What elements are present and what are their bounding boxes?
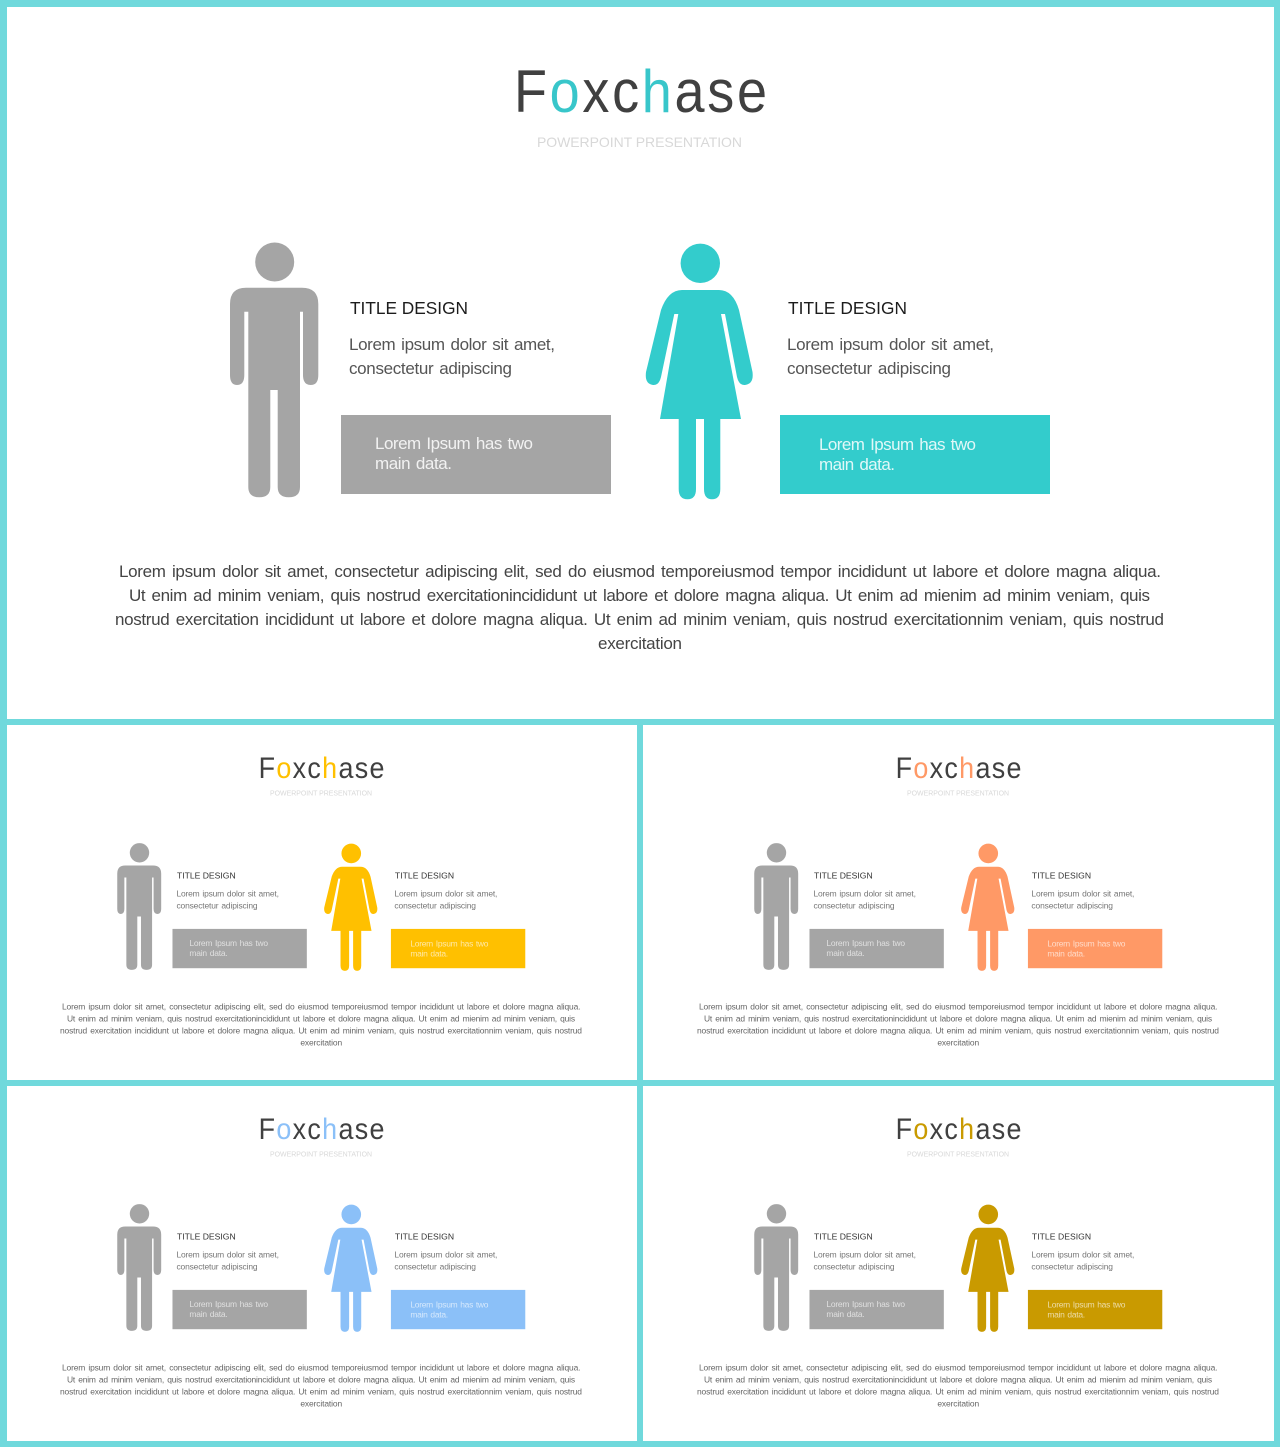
text block: left description: consectetur adipiscing: [176, 901, 258, 911]
text block: right description: [394, 1250, 497, 1272]
text block: paragraph: Lorem ipsum dolor sit amet, consectetur adipiscing elit, sed do eiusmod temporeiusmod tempor incididunt ut labore et dolore magna aliqua.: [699, 1002, 1218, 1012]
icon: man: [230, 242, 318, 497]
text block: paragraph: Ut enim ad minim veniam, quis nostrud exercitationincididunt ut labore et dolore magna aliqua. Ut enim ad mienim ad minim veniam, quis: [129, 586, 1150, 605]
text block: left description: Lorem ipsum dolor sit amet,: [813, 1250, 916, 1260]
callout: colored data box: Lorem Ipsum has two: [410, 938, 489, 948]
text block: left description: consectetur adipiscing: [813, 901, 895, 911]
callout: grey data box: main data.: [375, 454, 452, 473]
callout: grey data box: main data.: [189, 948, 228, 958]
panel: small slide gold: [643, 1086, 1274, 1441]
text block: paragraph: Ut enim ad minim veniam, quis nostrud exercitationincididunt ut labore et dolore magna aliqua. Ut enim ad mienim ad minim veniam, quis: [704, 1374, 1212, 1384]
callout: colored data box: main data.: [819, 455, 895, 474]
callout: grey data box: Lorem Ipsum has two: [826, 938, 905, 948]
text block: left description: [176, 1250, 279, 1272]
text block: left description: Lorem ipsum dolor sit amet,: [349, 335, 555, 354]
text block: paragraph: Ut enim ad minim veniam, quis nostrud exercitationincididunt ut labore et dolore magna aliqua. Ut enim ad mienim ad minim veniam, quis: [67, 1013, 575, 1023]
heading: left title design: TITLE DESIGN: [350, 298, 468, 318]
text block: paragraph: Lorem ipsum dolor sit amet, consectetur adipiscing elit, sed do eiusmod temporeiusmod tempor incididunt ut labore et dolore magna aliqua.: [62, 1002, 581, 1012]
callout: colored data box: Lorem Ipsum has two: [1047, 1299, 1126, 1309]
subtitle: POWERPOINT PRESENTATION: [907, 791, 1009, 798]
heading: right title design: TITLE DESIGN: [788, 298, 907, 318]
subtitle: POWERPOINT PRESENTATION: [270, 1152, 372, 1159]
callout: colored data box: main data.: [1047, 1309, 1085, 1319]
icon: man: [754, 843, 798, 970]
title: Foxchase logo: Foxchase: [896, 1113, 1021, 1146]
icon: woman: [961, 1205, 1014, 1332]
callout: colored data box: [391, 929, 525, 968]
callout: grey data box: [172, 929, 307, 968]
text block: paragraph: Lorem ipsum dolor sit amet, consectetur adipiscing elit, sed do eiusmod temporeiusmod tempor incididunt ut labore et dolore magna aliqua.: [62, 1363, 581, 1373]
text block: paragraph: [697, 1002, 1219, 1047]
text block: right description: [1031, 1250, 1134, 1272]
text block: left description: Lorem ipsum dolor sit amet,: [176, 889, 279, 899]
text block: paragraph: Ut enim ad minim veniam, quis nostrud exercitationincididunt ut labore et dolore magna aliqua. Ut enim ad mienim ad minim veniam, quis: [67, 1374, 575, 1384]
heading: right title design: TITLE DESIGN: [395, 1232, 454, 1242]
callout: colored data box: main data.: [1047, 948, 1085, 958]
callout: grey data box: [172, 1290, 307, 1329]
text block: left description: Lorem ipsum dolor sit amet,: [813, 889, 916, 899]
text block: left description: [813, 889, 916, 911]
callout: grey data box: main data.: [826, 948, 865, 958]
callout: colored data box: [1028, 929, 1162, 968]
subtitle: POWERPOINT PRESENTATION: [270, 791, 372, 798]
text block: right description: Lorem ipsum dolor sit amet,: [394, 889, 497, 899]
callout: grey data box: Lorem Ipsum has two: [375, 434, 533, 453]
icon: man: [117, 1204, 161, 1331]
icon: man: [754, 1204, 798, 1331]
title: Foxchase logo: Foxchase: [259, 752, 384, 785]
text block: right description: consectetur adipiscing: [1031, 901, 1113, 911]
text block: right description: [394, 889, 497, 911]
callout: colored data box: [391, 1290, 525, 1329]
text block: left description: Lorem ipsum dolor sit amet,: [176, 1250, 279, 1260]
text block: right description: Lorem ipsum dolor sit amet,: [787, 335, 994, 354]
text block: left description: [176, 889, 279, 911]
text block: paragraph: nostrud exercitation incididunt ut labore et dolore magna aliqua. Ut enim ad minim veniam, quis nostrud exercitationnim veniam, quis nostrud: [60, 1025, 582, 1035]
callout: colored data box: [780, 415, 1050, 494]
text block: paragraph: Ut enim ad minim veniam, quis nostrud exercitationincididunt ut labore et dolore magna aliqua. Ut enim ad mienim ad minim veniam, quis: [704, 1013, 1212, 1023]
icon: man: [117, 843, 161, 970]
text block: paragraph: Lorem ipsum dolor sit amet, consectetur adipiscing elit, sed do eiusmod temporeiusmod tempor incididunt ut labore et dolore magna aliqua.: [699, 1363, 1218, 1373]
icon: woman: [324, 844, 377, 971]
callout: grey data box: Lorem Ipsum has two: [189, 1299, 268, 1309]
text block: right description: [787, 335, 994, 378]
text block: right description: Lorem ipsum dolor sit amet,: [1031, 889, 1134, 899]
icon: woman: [961, 844, 1014, 971]
panel: small slide blue: [7, 1086, 637, 1441]
text block: right description: consectetur adipiscing: [394, 901, 476, 911]
heading: left title design: TITLE DESIGN: [814, 871, 873, 881]
heading: right title design: TITLE DESIGN: [1032, 871, 1091, 881]
callout: grey data box: [809, 1290, 944, 1329]
text block: paragraph: Lorem ipsum dolor sit amet, consectetur adipiscing elit, sed do eiusmod temporeiusmod tempor incididunt ut labore et dolore magna aliqua.: [119, 562, 1161, 581]
heading: left title design: TITLE DESIGN: [177, 1232, 236, 1242]
text block: paragraph: exercitation: [937, 1398, 979, 1408]
heading: left title design: TITLE DESIGN: [814, 1232, 873, 1242]
text block: right description: Lorem ipsum dolor sit amet,: [1031, 1250, 1134, 1260]
callout: colored data box: Lorem Ipsum has two: [1047, 938, 1126, 948]
text block: paragraph: exercitation: [598, 634, 682, 653]
callout: grey data box: Lorem Ipsum has two: [826, 1299, 905, 1309]
text block: paragraph: exercitation: [300, 1037, 342, 1047]
text block: paragraph: nostrud exercitation incididunt ut labore et dolore magna aliqua. Ut enim ad minim veniam, quis nostrud exercitationnim veniam, quis nostrud: [697, 1025, 1219, 1035]
callout: grey data box: main data.: [189, 1309, 228, 1319]
callout: colored data box: main data.: [410, 948, 448, 958]
text block: right description: consectetur adipiscing: [1031, 1262, 1113, 1272]
text block: left description: [349, 335, 555, 378]
callout: colored data box: Lorem Ipsum has two: [410, 1299, 489, 1309]
icon: woman: [324, 1205, 377, 1332]
callout: grey data box: [341, 415, 611, 494]
text block: paragraph: [60, 1363, 582, 1408]
panel: main slide teal: [7, 7, 1274, 719]
heading: right title design: TITLE DESIGN: [1032, 1232, 1091, 1242]
panel: small slide yellow: [7, 725, 637, 1080]
callout: grey data box: Lorem Ipsum has two: [189, 938, 268, 948]
text block: paragraph: [115, 562, 1164, 653]
title: Foxchase logo: Foxchase: [514, 58, 767, 126]
text block: right description: consectetur adipiscing: [394, 1262, 476, 1272]
text block: paragraph: [697, 1363, 1219, 1408]
callout: colored data box: main data.: [410, 1309, 448, 1319]
callout: colored data box: [1028, 1290, 1162, 1329]
text block: left description: consectetur adipiscing: [176, 1262, 258, 1272]
callout: grey data box: [809, 929, 944, 968]
text block: paragraph: exercitation: [937, 1037, 979, 1047]
text block: paragraph: nostrud exercitation incididunt ut labore et dolore magna aliqua. Ut enim ad minim veniam, quis nostrud exercitationnim veniam, quis nostrud: [60, 1386, 582, 1396]
text block: paragraph: exercitation: [300, 1398, 342, 1408]
heading: right title design: TITLE DESIGN: [395, 871, 454, 881]
icon: woman: [646, 244, 753, 499]
title: Foxchase logo: Foxchase: [259, 1113, 384, 1146]
subtitle: POWERPOINT PRESENTATION: [907, 1152, 1009, 1159]
text block: left description: consectetur adipiscing: [349, 359, 512, 378]
text block: right description: [1031, 889, 1134, 911]
text block: paragraph: nostrud exercitation incididunt ut labore et dolore magna aliqua. Ut enim ad minim veniam, quis nostrud exercitationnim veniam, quis nostrud: [115, 610, 1164, 629]
callout: grey data box: main data.: [826, 1309, 865, 1319]
panel: small slide orange: [643, 725, 1274, 1080]
heading: left title design: TITLE DESIGN: [177, 871, 236, 881]
text block: right description: Lorem ipsum dolor sit amet,: [394, 1250, 497, 1260]
text block: right description: consectetur adipiscing: [787, 359, 951, 378]
text block: paragraph: [60, 1002, 582, 1047]
text block: paragraph: nostrud exercitation incididunt ut labore et dolore magna aliqua. Ut enim ad minim veniam, quis nostrud exercitationnim veniam, quis nostrud: [697, 1386, 1219, 1396]
callout: colored data box: Lorem Ipsum has two: [819, 435, 976, 454]
subtitle: POWERPOINT PRESENTATION: [537, 134, 742, 150]
title: Foxchase logo: Foxchase: [896, 752, 1021, 785]
text block: left description: consectetur adipiscing: [813, 1262, 895, 1272]
text block: left description: [813, 1250, 916, 1272]
